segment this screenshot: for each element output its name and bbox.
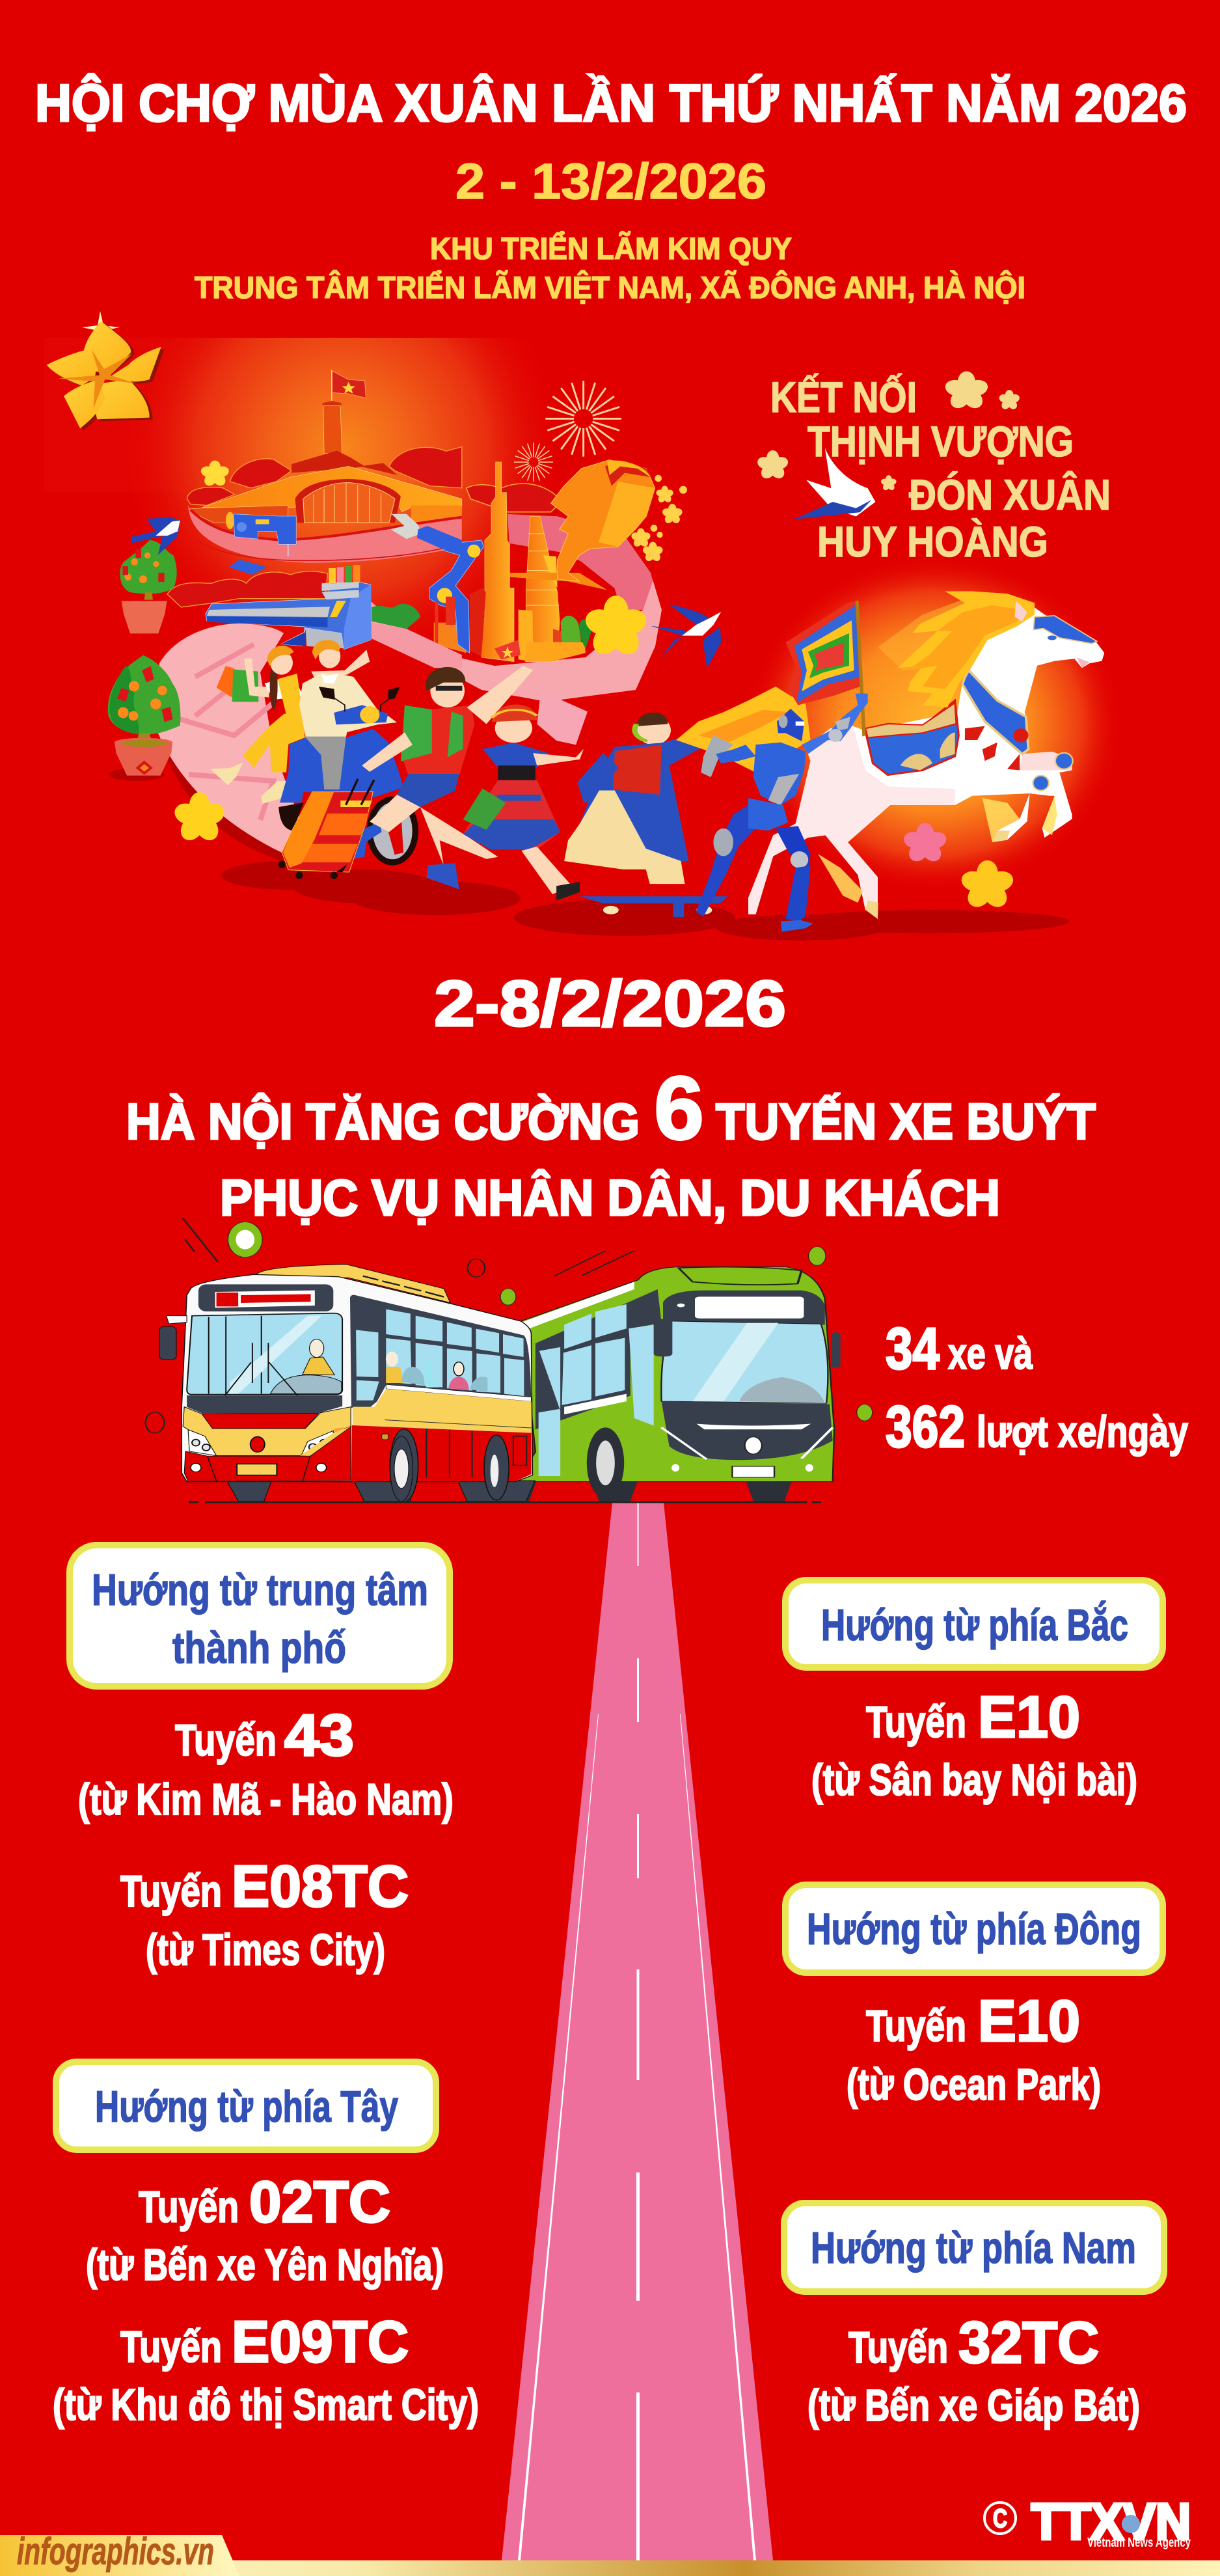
mane glow	[878, 596, 972, 670]
saddle cloth	[865, 700, 958, 775]
route 32TC	[807, 2310, 1140, 2430]
route E09TC: E09TC	[232, 2310, 409, 2375]
small flag on buildings	[495, 640, 521, 659]
robot	[696, 694, 868, 932]
people and trees group left	[108, 540, 415, 879]
route E09TC: Tuyến	[120, 2322, 222, 2372]
horse and robot group	[676, 592, 1104, 932]
route 02TC	[86, 2170, 444, 2290]
slogan	[770, 373, 1111, 566]
label box: thành phố	[172, 1623, 346, 1673]
upper ribbon right	[508, 514, 653, 612]
yellow bus	[159, 1265, 535, 1502]
big yellow apricot flower	[586, 596, 647, 655]
kumquat tree upper	[120, 540, 177, 633]
head strap	[1033, 616, 1097, 644]
towers	[481, 462, 514, 662]
girl in ethnic dress	[463, 691, 588, 901]
TTXVN logo: TTXVN	[1031, 2493, 1191, 2550]
horse tail	[676, 687, 811, 773]
route 43: (từ Kim Mã - Hào Nam)	[78, 1775, 454, 1824]
label box	[56, 2062, 436, 2150]
route E08TC	[120, 1854, 409, 1975]
flag tower	[323, 401, 342, 405]
ground shadows	[109, 733, 1069, 940]
swallow by slogan	[806, 448, 876, 516]
footer band	[0, 2560, 1220, 2576]
shrubs and ribbon behind	[372, 604, 420, 629]
label box	[785, 1580, 1163, 1667]
road line under buses	[189, 1501, 821, 1503]
route E08TC: E08TC	[232, 1854, 409, 1919]
slogan decoration	[755, 372, 1021, 519]
man rider	[319, 644, 340, 668]
label box: Hướng từ phía Tây	[95, 2082, 398, 2131]
route 32TC: 32TC	[958, 2310, 1099, 2376]
mane	[898, 592, 1035, 707]
suitcase	[282, 792, 373, 872]
man in ao dai on skateboard	[564, 713, 727, 917]
route 43: 43	[284, 1703, 354, 1768]
route E08TC: (từ Times City)	[146, 1925, 385, 1975]
background glows	[142, 338, 1108, 879]
colonnades	[191, 505, 288, 523]
woman	[244, 659, 269, 698]
festival illustration	[108, 338, 1109, 940]
pink blossom	[901, 823, 949, 865]
flag	[331, 370, 333, 402]
bus stats: xe và	[948, 1329, 1033, 1378]
robot arm	[429, 526, 483, 653]
bus headline	[126, 1058, 1096, 1226]
infographics.vn tab: infographics.vn	[17, 2530, 214, 2573]
fair dates: 2 - 13/2/2026	[455, 154, 766, 210]
panel: west direction	[53, 2062, 479, 2430]
route E10	[811, 1685, 1137, 1805]
panel: south direction	[784, 2203, 1164, 2430]
route E10: Tuyến	[866, 1697, 966, 1747]
bus stats: 34	[886, 1317, 940, 1382]
bus dates: 2-8/2/2026	[434, 967, 786, 1039]
walkers group	[362, 666, 727, 917]
fair venue: KHU TRIỂN LÃM KIM QUY	[430, 231, 792, 266]
title: HỘI CHỢ MÙA XUÂN LẦN THỨ NHẤT NĂM 2026	[35, 74, 1187, 133]
route 02TC: 02TC	[249, 2170, 390, 2235]
roof	[202, 467, 462, 512]
green bus	[459, 1267, 841, 1501]
label box	[70, 1545, 450, 1686]
route E10 east: E10	[978, 1989, 1080, 2054]
label box: Hướng từ phía Bắc	[821, 1600, 1128, 1650]
route E09TC	[53, 2310, 479, 2430]
clouds right	[467, 484, 562, 512]
route E10 east: (từ Ocean Park)	[847, 2060, 1101, 2109]
bus headline: HÀ NỘI TĂNG CƯỜNG	[126, 1093, 640, 1150]
label box	[784, 2203, 1164, 2292]
bus headline: TUYẾN XE BUÝT	[716, 1093, 1096, 1150]
route 43	[78, 1703, 454, 1824]
swallow right	[651, 604, 721, 668]
fair venue: TRUNG TÂM TRIỂN LÃM VIỆT NAM, XÃ ĐÔNG ANH, HÀ NỘI	[195, 270, 1025, 305]
fireworks	[545, 381, 621, 457]
route E10 east	[847, 1989, 1101, 2109]
route E08TC: Tuyến	[120, 1867, 222, 1916]
bus stats	[886, 1317, 1188, 1460]
monument group	[167, 370, 462, 668]
TTXVN logo: C	[993, 2504, 1007, 2533]
upper ribbon left	[188, 505, 462, 563]
bus headline: 6	[654, 1058, 704, 1158]
slogan: KẾT NỐI	[770, 373, 917, 421]
bus headline: PHỤC VỤ NHÂN DÂN, DU KHÁCH	[220, 1169, 1000, 1226]
leg fire	[983, 798, 1020, 842]
city and ribbon group right	[429, 381, 721, 668]
decorative bubbles	[146, 1218, 873, 1433]
route E10: (từ Sân bay Nội bài)	[811, 1755, 1137, 1805]
yellow blossom	[958, 860, 1016, 911]
route E10: E10	[978, 1685, 1080, 1750]
phoenix	[551, 460, 655, 581]
panel: east direction	[785, 1885, 1163, 2109]
chest strap	[962, 670, 1029, 754]
illustration: two city buses	[146, 1218, 873, 1502]
slogan: THỊNH VƯỢNG	[807, 417, 1074, 465]
panel: north direction	[785, 1580, 1163, 1805]
route E09TC: (từ Khu đô thị Smart City)	[53, 2380, 479, 2430]
robot gripper	[390, 514, 422, 539]
horse body	[748, 608, 1104, 919]
machine stand	[229, 560, 267, 575]
label box: Hướng từ phía Nam	[811, 2223, 1136, 2273]
sacred flag	[785, 601, 866, 737]
loom	[206, 582, 372, 650]
route 32TC: Tuyến	[848, 2323, 948, 2372]
slogan: ĐÓN XUÂN	[909, 471, 1111, 519]
route 02TC: (từ Bến xe Yên Nghĩa)	[86, 2240, 444, 2290]
slogan: HUY HOÀNG	[817, 517, 1048, 566]
label box	[785, 1885, 1163, 1973]
sewing machine	[234, 514, 296, 544]
fair venue	[195, 231, 1025, 305]
route E10 east: Tuyến	[866, 2001, 966, 2051]
route 02TC: Tuyến	[139, 2182, 239, 2232]
panel: city centre direction	[70, 1545, 454, 1975]
route 43: Tuyến	[175, 1716, 277, 1765]
runner with backpack	[362, 666, 533, 889]
yellow flower	[172, 792, 227, 845]
colour rods	[329, 568, 336, 583]
arch hall	[295, 479, 401, 523]
kumquat tree lower	[108, 655, 180, 776]
road	[502, 1503, 773, 2560]
bus stats: 362	[886, 1395, 965, 1460]
icon: gold five-petal apricot logo	[47, 311, 165, 430]
shopping bags	[217, 666, 234, 698]
pink ribbon lower	[158, 579, 662, 853]
clouds	[167, 447, 462, 607]
scooter	[280, 729, 403, 802]
label box: Hướng từ trung tâm	[92, 1565, 428, 1615]
